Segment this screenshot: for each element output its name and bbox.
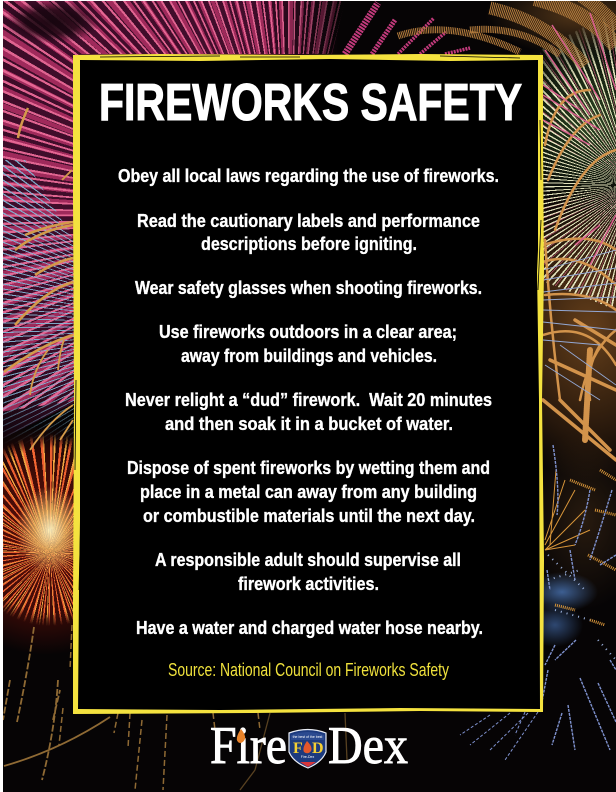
panel: yellow frame (73, 54, 544, 714)
tip: outdoors (159, 322, 457, 366)
tip: adult supervision (155, 550, 461, 594)
panel: black notice area (75, 56, 541, 710)
safety tips list (118, 166, 499, 638)
maroon haze behind pink burst (3, 1, 327, 438)
blue dots (548, 555, 616, 660)
tip: dispose: place in a metal can away from any building (140, 482, 477, 502)
tip: dispose: Dispose of spent fireworks by wetting them and (127, 458, 490, 478)
logo word: Dex: Dex (328, 717, 408, 775)
white green burst at right (540, 14, 616, 308)
gold arcs top right (398, 0, 616, 66)
gold falling trails (3, 625, 347, 790)
tip: adult supervision: A responsible adult should supervise all (155, 550, 461, 570)
red and orange burst (3, 434, 74, 626)
tip: dud firework: Never relight a “dud” firework. Wait 20 minutes (125, 390, 492, 410)
icon: shield (289, 730, 326, 768)
tip: obey laws: Obey all local laws regarding the use of fireworks. (118, 166, 499, 186)
blue streaks lower right (460, 445, 616, 760)
icon: shield: Fire-Dex (301, 755, 314, 759)
tip: read labels: Read the cautionary labels and performance (137, 211, 480, 231)
pink spikes top right (345, 3, 470, 54)
icon: shield: D (312, 740, 324, 757)
tip: dud firework (125, 390, 492, 434)
logo word: Fire: Fire (210, 717, 287, 775)
tip: read labels: descriptions before igniting. (201, 234, 417, 254)
tip: dud firework: and then soak it in a bucket of water. (165, 414, 453, 434)
pink burst (3, 1, 344, 412)
blue streak burst on left (3, 160, 74, 442)
tip: dispose (127, 458, 490, 526)
tip: adult supervision: firework activities. (238, 574, 379, 594)
pink rays right (543, 13, 616, 265)
icon: shield: the best of the best (293, 735, 322, 739)
tip: outdoors: away from buildings and vehicles. (181, 346, 437, 366)
gold arcs left (4, 108, 73, 450)
icon: flame over i (237, 729, 245, 743)
blue lines right (543, 250, 616, 400)
gold arcs right (543, 90, 616, 460)
logo: Fire-Dex (210, 717, 408, 775)
tip: water hose: Have a water and charged water hose nearby. (136, 618, 483, 638)
tip: dispose: or combustible materials until the next day. (143, 506, 475, 526)
tip: safety glasses: Wear safety glasses when shooting fireworks. (135, 278, 482, 298)
tip: read labels (137, 211, 480, 254)
source line: Source: National Council on Fireworks Safety (168, 660, 449, 680)
icon: shield: F (293, 740, 303, 757)
sparkle bursts lower right (545, 470, 616, 625)
tip: outdoors: Use fireworks outdoors in a clear area; (159, 322, 457, 342)
